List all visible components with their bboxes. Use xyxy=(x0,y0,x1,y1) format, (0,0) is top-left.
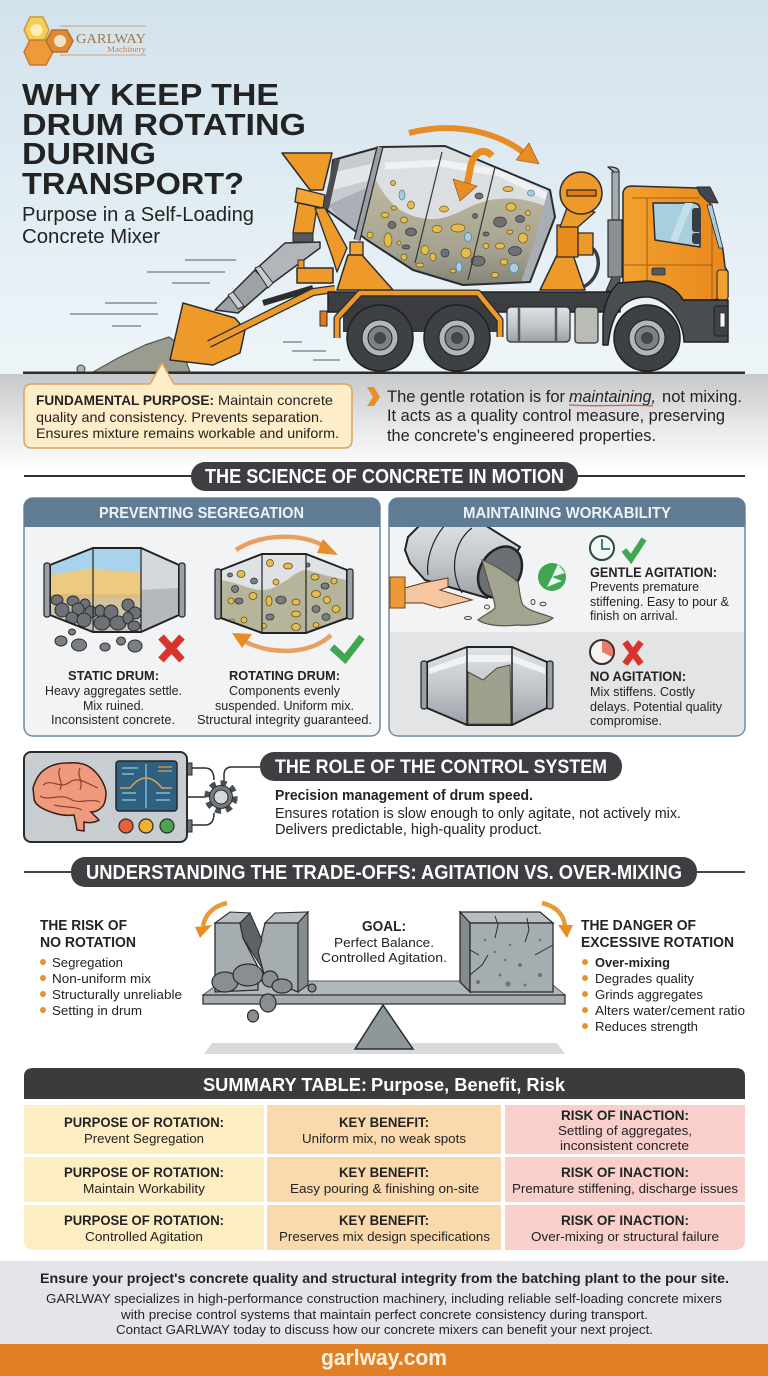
risk of no rotation: Segregation xyxy=(52,955,123,970)
heading: control system: THE ROLE OF THE CONTROL SYSTEM xyxy=(275,756,607,778)
hopper xyxy=(282,153,332,190)
solid block xyxy=(460,912,553,992)
benefit column: KEY BENEFIT: xyxy=(339,1213,429,1228)
subtitle: Purpose in a Self-Loading xyxy=(22,204,254,226)
text: gentle agitation: GENTLE AGITATION: xyxy=(590,564,717,580)
cab xyxy=(623,186,728,300)
footer call to action: Contact GARLWAY today to discuss how our concrete mixers can benefit your next project. xyxy=(116,1322,653,1337)
text: gentle agitation: Prevents premature xyxy=(590,580,699,594)
text: gentle agitation xyxy=(590,564,730,623)
subtitle: Concrete Mixer xyxy=(22,226,160,248)
logo: Machinery xyxy=(107,45,146,54)
brain xyxy=(33,763,106,831)
drum outline xyxy=(327,146,555,285)
fuel tank xyxy=(507,307,598,343)
text: gentle agitation: stiffening. Easy to pour & xyxy=(590,595,730,609)
icon: green cycle xyxy=(538,563,566,591)
connector tabs xyxy=(187,763,192,832)
website bar: garlway.com xyxy=(321,1345,447,1370)
callout: fundamental purpose: Ensures mixture remains workable and uniform. xyxy=(36,425,339,441)
callout: fundamental purpose: FUNDAMENTAL PURPOSE: xyxy=(36,392,214,408)
logo: GARLWAY xyxy=(76,32,146,47)
danger of excessive rotation: Grinds aggregates xyxy=(595,987,704,1002)
purpose column xyxy=(24,1105,264,1250)
footer call to action xyxy=(0,1261,768,1344)
benefit column: Easy pouring & finishing on-site xyxy=(290,1181,479,1196)
loading arm xyxy=(209,289,335,344)
wheels xyxy=(347,305,680,371)
text: gentle agitation: finish on arrival. xyxy=(590,609,678,623)
benefit column: Preserves mix design specifications xyxy=(279,1229,491,1244)
risk of no rotation xyxy=(40,918,182,1018)
risk column: RISK OF INACTION: xyxy=(561,1213,689,1228)
title: WHY KEEP THE xyxy=(22,77,279,112)
arrow right xyxy=(542,903,573,938)
title: DURING xyxy=(22,136,156,171)
lower half shade xyxy=(390,632,744,735)
table header: Purpose, Benefit, Risk xyxy=(371,1075,566,1095)
title: TRANSPORT? xyxy=(22,166,244,201)
arrow left xyxy=(195,903,227,938)
caption: rotating drum: Components evenly xyxy=(229,684,341,698)
risk column: Over-mixing or structural failure xyxy=(531,1229,719,1244)
rotating drum xyxy=(214,550,354,635)
text: control system: Delivers predictable, high-quality product. xyxy=(275,822,542,838)
caption: rotating drum: Structural integrity guaranteed. xyxy=(197,713,372,727)
text: no agitation: Mix stiffens. Costly xyxy=(590,685,696,699)
heading: trade-offs: UNDERSTANDING THE TRADE-OFFS: AGITATION VS. OVER-MIXING xyxy=(86,862,682,884)
danger of excessive rotation: EXCESSIVE ROTATION xyxy=(581,935,734,951)
danger of excessive rotation: Over-mixing xyxy=(595,955,670,970)
text: control system: Ensures rotation is slow enough to only agitate, not actively mix. xyxy=(275,806,681,822)
callout: fundamental purpose: quality and consistency. Prevents separation. xyxy=(36,409,323,425)
benefit column xyxy=(267,1105,501,1250)
icon: check xyxy=(624,539,644,559)
beam xyxy=(203,981,565,1004)
support column xyxy=(293,188,333,283)
panel header left xyxy=(24,498,380,527)
rear brace and foot xyxy=(315,208,393,290)
panel: preventing segregation: PREVENTING SEGREGATION xyxy=(99,505,304,522)
caption: static drum: Heavy aggregates settle. xyxy=(45,684,182,698)
rotation arrow outer xyxy=(409,128,539,164)
pouring drum xyxy=(405,522,553,626)
icon: clock late xyxy=(590,640,614,664)
risk of no rotation: Non-uniform mix xyxy=(52,971,152,986)
website bar xyxy=(0,1344,768,1376)
drum body xyxy=(328,147,554,284)
heading: trade-offs xyxy=(24,857,745,887)
subtitle xyxy=(22,204,254,248)
statement text: the concrete's engineered properties. xyxy=(387,426,656,445)
exhaust stack xyxy=(606,167,622,291)
benefit column: KEY BENEFIT: xyxy=(339,1115,429,1130)
panel: preventing segregation xyxy=(24,498,380,736)
purpose column: Maintain Workability xyxy=(83,1181,206,1196)
statement text: The gentle rotation is for xyxy=(387,387,565,406)
statement text: not mixing. xyxy=(662,387,742,406)
risk of no rotation: Setting in drum xyxy=(52,1003,142,1018)
heading: science xyxy=(24,462,745,491)
icon: chevron xyxy=(367,387,380,406)
risk column: Settling of aggregates, xyxy=(558,1123,692,1138)
illustration: self-loading concrete mixer truck xyxy=(77,128,728,373)
broken block xyxy=(212,912,316,1022)
screen xyxy=(116,761,177,811)
text: no agitation: delays. Potential quality xyxy=(590,700,723,714)
risk of no rotation: Structurally unreliable xyxy=(52,987,182,1002)
scale shadow xyxy=(204,1043,565,1054)
callout: fundamental purpose xyxy=(24,363,352,448)
title xyxy=(22,77,306,201)
status lights xyxy=(119,819,174,833)
hand xyxy=(390,577,472,608)
text: control system xyxy=(275,788,681,838)
icon: cross xyxy=(625,642,641,664)
statement text: It acts as a quality control measure, preserving xyxy=(387,406,725,425)
risk column: Premature stiffening, discharge issues xyxy=(512,1181,739,1196)
chassis xyxy=(320,281,728,345)
footer call to action: with precise control systems that maintain perfect concrete consistency during transport. xyxy=(120,1307,648,1322)
risk column: RISK OF INACTION: xyxy=(561,1165,689,1180)
caption: static drum: STATIC DRUM: xyxy=(68,668,159,683)
rotation arrow inner xyxy=(453,151,492,201)
text: control system: Precision management of drum speed. xyxy=(275,788,533,804)
purpose column: PURPOSE OF ROTATION: xyxy=(64,1115,224,1130)
bucket xyxy=(170,303,245,365)
speed lines xyxy=(70,260,340,360)
caption: static drum: Mix ruined. xyxy=(83,699,144,713)
table header: SUMMARY TABLE: xyxy=(203,1075,367,1095)
material pile xyxy=(77,337,190,373)
drum bands xyxy=(326,147,380,240)
falling stones xyxy=(55,629,142,652)
danger of excessive rotation: Degrades quality xyxy=(595,971,695,986)
caption: static drum: Inconsistent concrete. xyxy=(51,713,175,727)
title: DRUM ROTATING xyxy=(22,107,306,142)
background band xyxy=(0,374,768,470)
control box xyxy=(24,752,187,842)
danger of excessive rotation: Reduces strength xyxy=(595,1019,698,1034)
risk column: RISK OF INACTION: xyxy=(561,1108,689,1123)
risk column xyxy=(505,1105,745,1250)
risk column: inconsistent concrete xyxy=(560,1138,689,1153)
text: no agitation: NO AGITATION: xyxy=(590,668,686,684)
ground line xyxy=(23,372,745,374)
icon: clock ok xyxy=(590,536,614,560)
text: no agitation: compromise. xyxy=(590,714,662,728)
goal text: Controlled Agitation. xyxy=(321,950,447,965)
panel: control unit illustration xyxy=(24,752,262,842)
purpose column: Controlled Agitation xyxy=(85,1229,203,1244)
callout: fundamental purpose: Maintain concrete xyxy=(218,392,333,408)
footer call to action: GARLWAY specializes in high-performance construction machinery, including reliable self-loading concrete mixers xyxy=(46,1291,723,1306)
goal text: GOAL: xyxy=(362,919,406,935)
goal text xyxy=(321,919,447,965)
drive pump xyxy=(540,172,602,290)
arrow: bottom xyxy=(232,633,331,651)
caption: rotating drum: ROTATING DRUM: xyxy=(229,668,340,683)
benefit column: Uniform mix, no weak spots xyxy=(302,1131,467,1146)
arrow: top xyxy=(236,537,338,555)
statement text: maintaining, xyxy=(569,387,656,406)
purpose column: PURPOSE OF ROTATION: xyxy=(64,1165,224,1180)
logo xyxy=(24,17,146,65)
wires xyxy=(187,767,262,825)
background sky xyxy=(0,0,768,374)
panel header right xyxy=(389,498,745,527)
icon: green check xyxy=(332,637,362,659)
loading chute xyxy=(215,242,320,313)
danger of excessive rotation: Alters water/cement ratio xyxy=(595,1003,745,1018)
fulcrum xyxy=(355,1005,413,1049)
heading: science: THE SCIENCE OF CONCRETE IN MOTION xyxy=(205,465,564,488)
table header xyxy=(24,1068,745,1099)
gear xyxy=(207,783,235,811)
caption: static drum xyxy=(45,668,182,727)
purpose column: Prevent Segregation xyxy=(84,1131,204,1146)
summary table xyxy=(24,1068,745,1250)
goal text: Perfect Balance. xyxy=(334,935,434,950)
icon: red cross xyxy=(161,637,182,660)
balance scale xyxy=(195,903,573,1054)
risk of no rotation: NO ROTATION xyxy=(40,935,136,951)
danger of excessive rotation: THE DANGER OF xyxy=(581,918,696,934)
purpose column: PURPOSE OF ROTATION: xyxy=(64,1213,224,1228)
closed drum xyxy=(421,647,553,725)
caption: rotating drum xyxy=(197,668,372,727)
panel: maintaining workability: MAINTAINING WORKABILITY xyxy=(463,505,672,522)
caption: rotating drum: suspended. Uniform mix. xyxy=(215,699,354,713)
danger of excessive rotation xyxy=(581,918,745,1034)
statement text xyxy=(387,387,742,445)
risk of no rotation: THE RISK OF xyxy=(40,918,127,934)
static drum xyxy=(43,545,185,635)
footer call to action: Ensure your project's concrete quality and structural integrity from the batching plant to the pour site. xyxy=(40,1270,729,1286)
arm fill xyxy=(209,289,335,344)
text: no agitation xyxy=(590,668,723,728)
benefit column: KEY BENEFIT: xyxy=(339,1165,429,1180)
second arm xyxy=(263,288,313,303)
panel: maintaining workability xyxy=(389,498,745,736)
